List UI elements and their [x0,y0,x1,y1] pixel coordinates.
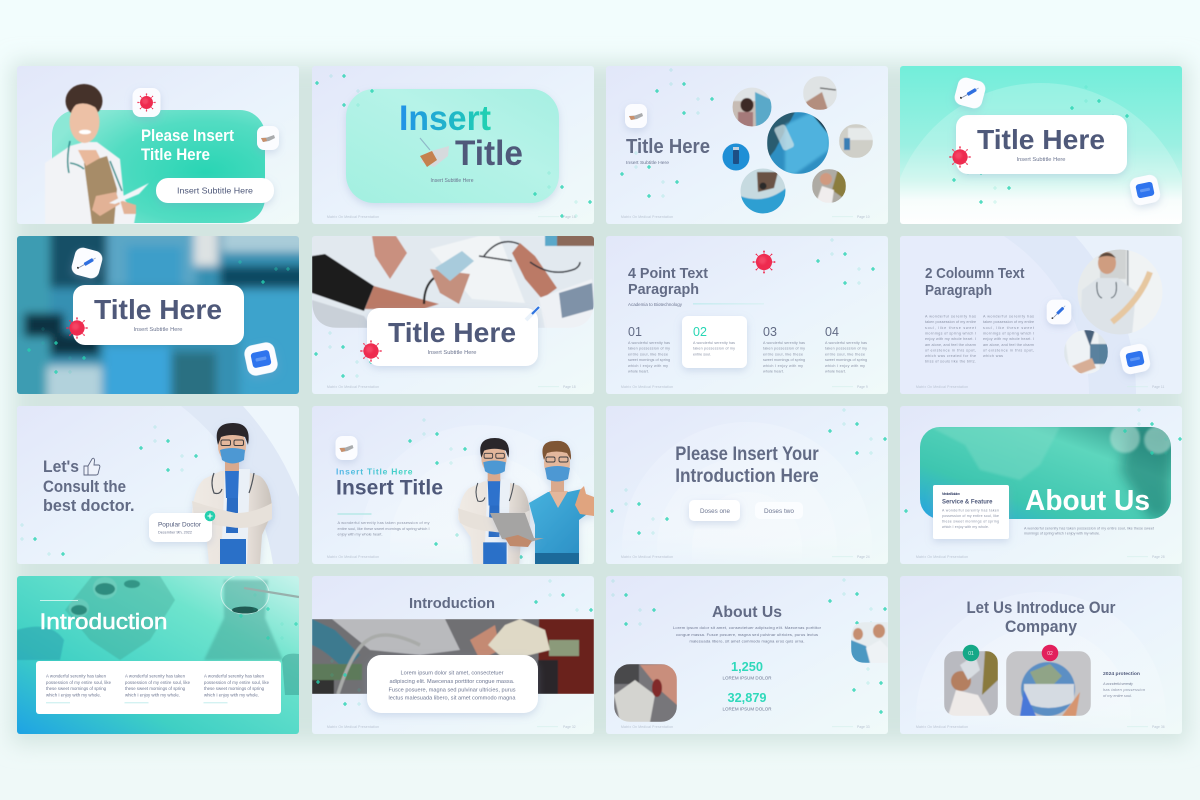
slide 1: doctor cover [17,66,299,224]
stat: 1,250: LOREM IPSUM DOLOR [722,676,772,680]
plus sparkles [6,425,198,570]
body text: lectus malesuada libero, sit amet commodo magna [388,696,516,702]
body text [388,670,516,702]
footer: Matrix On Medical Presentation [916,385,968,389]
slide 6: blood pressure cover [312,234,595,394]
blurred photo background [0,220,320,410]
column 02: taken possession of my [693,346,735,350]
column 04: which I enjoy with my [825,364,865,368]
text column two: am alone, and feel the charm [983,343,1034,347]
icon: syringe tile [70,246,104,280]
body text: Fusce posuere, magna sed pulvinar ultricies, purus [388,688,516,694]
column 03: which I enjoy with my [763,364,803,368]
body text: mornings of spring which I enjoy with my whole. [1024,532,1100,536]
footer: Matrix On Medical Presentation [916,555,968,559]
icon: thumbs up [84,458,100,475]
column 03: whole heart. [763,370,784,374]
plus sparkles [816,238,875,285]
heading [925,265,1024,299]
subtitle: Insert Subtitle Here [626,160,670,165]
title: Title Here [388,317,516,348]
plus sparkles [239,593,298,640]
plus sparkles [620,68,714,198]
body text [673,625,822,644]
white text card: these sweet mornings of spring [125,686,186,691]
footer [327,216,576,219]
text column two: taken possession of my entire [983,320,1034,324]
subtitle: Insert Subtitle Here [134,327,183,333]
footer: Matrix On Medical Presentation [327,215,379,219]
button: doses two [755,502,803,519]
slide 14: introduction with dental photo [312,576,594,734]
photo: doctor with x-ray [1064,330,1108,374]
3D doctor [192,423,272,564]
footer: Matrix On Medical Presentation [327,555,379,559]
plus sparkles [952,85,1129,204]
plus sparkles [314,331,373,378]
white text card: A wonderful serenity has taken [204,674,265,678]
plus sparkles [904,408,1182,513]
heading: best doctor. [43,496,134,515]
heading: Let Us Introduce Our [966,599,1116,617]
footer: Matrix On Medical Presentation [327,385,379,389]
footer [621,216,870,219]
footer: Matrix On Medical Presentation [621,725,673,729]
white text card: possession of my entire soul, like [46,680,112,685]
footer: Page 10 [857,215,870,219]
footer [916,555,1165,559]
title second line: Title Here [141,146,210,164]
white text card: possession of my entire soul, like [204,680,270,685]
title card [956,115,1127,174]
heading [675,444,819,487]
icon: syringe tile [1047,300,1071,324]
background arches [622,422,872,564]
title card [73,285,244,345]
text column one: A wonderful serenity has [925,314,976,318]
text column one: enjoy with my whole heart. I [925,337,976,341]
subtitle: Insert Subtitle Here [428,350,477,356]
mint title card [52,110,265,223]
column 04: A wonderful serenity has [825,341,867,345]
stat: 1,250 [722,659,772,680]
white service card: Service & Feature [942,500,993,506]
caption: A wonderful serenity [1102,681,1134,686]
body text: adipiscing elit. Maecenas porttitor congue massa. [390,679,515,685]
text column two: A wonderful serenity has [983,314,1034,318]
column 02: A wonderful serenity has [693,341,735,345]
icon: soap tile [1118,342,1152,376]
column 03: 03 [763,325,777,339]
column 03: entire soul, like these [763,352,803,356]
text card [367,655,538,713]
footer [916,385,1164,389]
badge: popular doctor: December 9th, 2022 [158,530,192,534]
icon: virus [66,317,88,339]
text column one: which was created for the [925,354,976,358]
footer [621,385,868,389]
text column one: soul, like these sweet [925,326,976,330]
photo: hand on wrist [740,168,786,214]
text column one: am alone, and feel the charm [925,343,976,347]
body text: A wonderful serenity has taken possession of my entire soul, like these sweet [1024,526,1154,530]
photo: clinic room [839,124,873,158]
photo: dentist [312,619,594,694]
photo: doctors [851,622,888,663]
slide 15: about us statistics [597,576,911,734]
footer: Page 18 [563,385,576,389]
photo: dental close-up [614,664,677,722]
doctor figure [45,84,149,224]
column 01: which I enjoy with my [628,364,668,368]
background arches [360,425,600,564]
title: Title Here [94,294,222,325]
column 01 [628,325,670,374]
column 03: A wonderful serenity has [763,341,805,345]
heading: Please Insert Your [675,444,819,465]
icon: virus [949,146,971,168]
stat: 32,879: LOREM IPSUM DOLOR [722,706,772,712]
footer [621,555,870,559]
title rule [40,599,78,602]
photo: nurse [732,87,772,127]
button: doses one [689,500,740,521]
footer: Page 11 [1152,385,1164,389]
badge: popular doctor [149,511,215,542]
column 01: A wonderful serenity has [628,341,670,345]
mint title card [346,89,559,203]
icon: virus tile [132,88,160,117]
highlighted card [682,316,747,368]
background arches [916,592,1166,734]
plus sparkles [27,260,290,374]
white text card: A wonderful serenity has taken [125,674,186,678]
text column one: taken possession of my entire [925,320,976,324]
footer: Page 32 [563,725,576,729]
plus sparkles [534,579,593,626]
column 01: sweet mornings of spring [628,358,670,362]
column 02 [693,325,735,356]
column 04: entire soul, like these [825,352,865,356]
title: About Us [1025,485,1150,517]
column 03: sweet mornings of spring [763,358,805,362]
heading: Consult the [43,477,126,496]
footer: Matrix On Medical Presentation [621,385,673,389]
text column two: of existence in this spot, [983,348,1034,352]
body text: enjoy with my whole heart. [338,532,382,536]
column 03: taken possession of my [763,346,805,350]
text column two: mornings of spring which I [983,332,1034,336]
badge: popular doctor: Popular Doctor [158,522,201,528]
photo overlay: flask [204,574,299,695]
stat: 1,250: 1,250 [731,659,763,674]
caption: has taken possession [1103,687,1145,692]
text column one: mornings of spring which I [925,332,976,336]
photo: blood pressure check [312,234,595,328]
footer: Page 28 [1152,555,1165,559]
photo overlay: test tubes [17,576,175,660]
icon: hand tile [257,126,279,150]
slide 4: mint title here [900,66,1182,224]
slide 13: introduction with beakers [17,574,299,734]
photo: doctor with spine [1077,249,1163,335]
photo cluster [722,76,873,214]
text column two: soul, like these sweet [983,326,1034,330]
white text card: which I enjoy with my whole. [46,692,101,698]
subtitle: Insert Subtitle Here [1016,157,1066,163]
plus sparkles [597,578,911,714]
footer [916,725,1165,729]
white text card: A wonderful serenity has taken [46,674,107,678]
heading [966,599,1116,636]
slide 9: consult the best doctor [6,406,299,570]
text column one: of existence in this spot, [925,348,976,352]
subtitle pill [156,178,274,203]
footer: Matrix On Medical Presentation [621,215,673,219]
icon: hand with syringe [420,138,449,167]
sub heading: Academia to Biotechnology [628,302,683,307]
body text [338,521,430,536]
heading [43,457,134,515]
heading: 2 Coloumn Text [925,265,1024,282]
column 01: entire soul, like these [628,352,668,356]
photo: girl with mask [812,169,846,203]
laptop [490,513,544,547]
title word: Title [455,134,523,173]
white service card: which I enjoy with my whole. [942,525,989,529]
slide 11: please insert your introduction [606,406,888,564]
plus sparkles [315,60,592,218]
white text card: which I enjoy with my whole. [125,692,180,698]
subtitle pill: Insert Subtitle Here [177,186,253,196]
slide 8: 2 column text paragraph [664,158,1182,630]
footer: Page 24 [857,555,870,559]
heading: 4 Point Text [628,265,708,282]
white service card: these sweet mornings of spring [942,520,999,524]
slide 3: photo circles [606,66,888,224]
badge 01: 01 [968,651,974,657]
slide 10: insert title with doctors [312,406,600,565]
photo: child with mask [944,651,998,716]
white text card: possession of my entire soul, like [125,680,191,685]
white text card: which I enjoy with my whole. [204,692,259,698]
heading: Company [1005,618,1078,636]
footer: Matrix On Medical Presentation [621,555,673,559]
text column two [983,314,1034,358]
button: doses two: Doses two [764,509,795,515]
body text: malesuada libero, sit amet commodo magna eros quis urna. [690,638,804,644]
caption: 2024 protection [1103,671,1140,677]
footer: Page 36 [1152,725,1165,729]
heading [628,265,708,298]
background arcs [664,158,1136,630]
text column two: which was [983,354,1003,358]
white service card: A wonderful serenity has taken [942,508,999,512]
column 01: 01 [628,325,642,339]
icon: soap tile [1128,173,1162,207]
heading: Let's [43,457,79,476]
badge 02 [1042,645,1058,661]
body text: Lorem ipsum dolor sit amet, consectetuer adipiscing elit. Maecenas porttitor [673,625,822,630]
heading: About Us [712,604,782,621]
column 04: sweet mornings of spring [825,358,867,362]
column 04: whole heart. [825,370,846,374]
footer [327,385,576,389]
title: Title Here [626,136,710,158]
button: doses one: Doses one [700,509,731,515]
white service card: possession of my entire soul, like [942,514,999,518]
heading: Introduction [409,595,495,612]
subtitle: Insert Subtitle Here [430,178,474,184]
column 04: 04 [825,325,839,339]
badge 01 [963,645,979,661]
white service card: Medical Solution [942,492,960,496]
slide 5: blurred surgery cover [17,236,299,394]
caption: of my entire soul. [1103,693,1132,698]
body text: entire soul, like these sweet mornings of spring which I [338,527,430,531]
column 02: 02 [693,325,707,339]
plus sparkles [408,418,523,559]
column 01: whole heart. [628,370,649,374]
icon: syringe [526,306,540,320]
3D nurse [529,441,594,564]
arch [900,83,1182,184]
title: Introduction [40,609,168,634]
stat: 32,879 [722,690,772,712]
title: Please Insert [141,127,234,145]
title card [367,308,538,366]
white text card: these sweet mornings of spring [46,686,107,691]
white text card: these sweet mornings of spring [204,686,265,691]
heading: Introduction Here [675,466,819,487]
slide 12: about us banner [900,406,1182,564]
small title: Insert Title Here [336,466,413,476]
icon: hand tile [625,104,647,128]
photo: blue vial [722,144,750,170]
column 04 [825,325,867,374]
column 02: entire soul. [693,352,711,356]
body text: A wonderful serenity has taken possession of my [338,521,430,525]
column 04: taken possession of my [825,346,867,350]
title: Insert Title [336,476,443,500]
slide 7: 4 point text paragraph [606,236,888,394]
heading: Paragraph [925,282,992,299]
white service card [933,485,1009,539]
plus sparkles lower [316,659,375,706]
footer: Matrix On Medical Presentation [916,725,968,729]
photo: hands with glasses [803,76,837,110]
3D doctor [458,438,530,565]
footer: Matrix On Medical Presentation [327,725,379,729]
body text: Lorem ipsum dolor sit amet, consectetuer [400,670,504,676]
stat: 32,879: 32,879 [728,690,766,705]
column 01: taken possession of my [628,346,670,350]
plus sparkles [610,408,887,535]
icon: virus [753,251,775,273]
gradient title word: Insert [399,99,491,138]
white text card [36,661,281,714]
column 03 [763,325,805,374]
footer [621,725,870,729]
heading: Paragraph [628,281,699,298]
body text [1024,526,1154,536]
icon: soap tile [243,341,279,377]
footer [327,725,576,729]
photo: vials and gloves [767,112,829,174]
icon: syringe tile [953,76,987,110]
text column two: enjoy with my whole heart. I [983,337,1034,341]
icon: hand tile [336,436,358,460]
body text: congue massa. Fusce posuere, magna sed pulvinar ultricies, purus lectus [676,632,818,637]
background arcs [17,406,299,564]
text column one [925,314,976,364]
title: Title Here [977,124,1105,155]
badge 02: 02 [1047,651,1053,657]
photo: globe with mask [1006,651,1091,716]
footer: Page 33 [857,725,870,729]
caption [1102,671,1145,698]
footer: Page 9 [857,385,868,389]
text column one: bliss of souls like the blitz. [925,360,976,364]
footer: Page 16 [563,215,576,219]
teal photo banner [920,423,1172,519]
slide 2: insert title [312,60,594,224]
slide 16: let us introduce our company [900,576,1182,734]
icon: virus [360,340,382,362]
